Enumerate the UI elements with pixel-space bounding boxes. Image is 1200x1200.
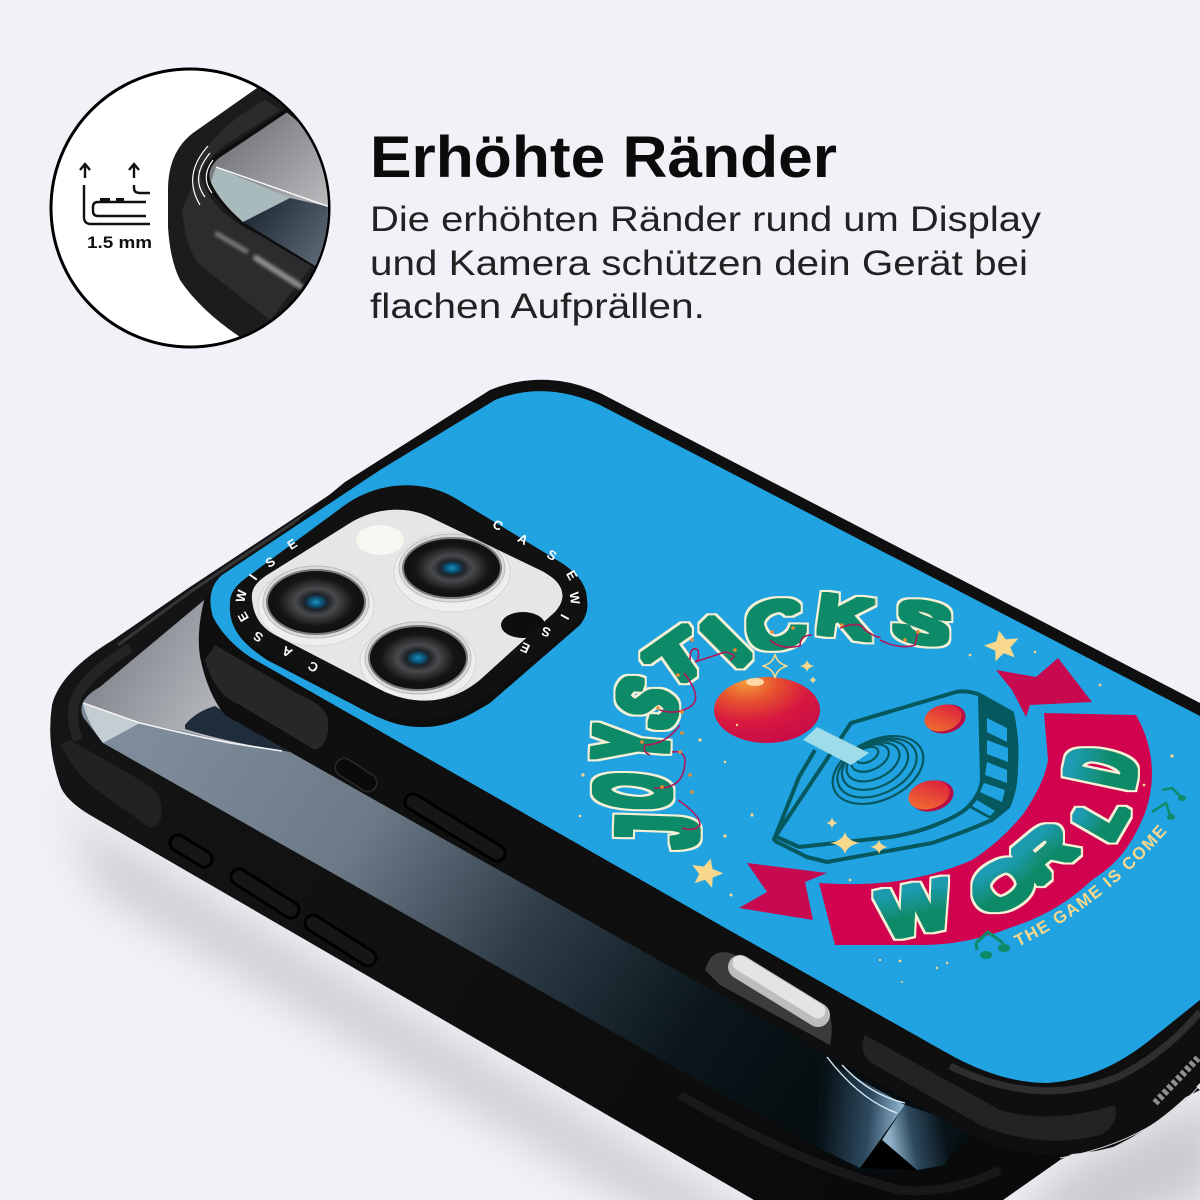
word: JOYSTICKS: S xyxy=(888,587,957,659)
rear frame top edge highlight xyxy=(118,478,360,645)
icon: music note left xyxy=(976,932,1010,959)
string lights xyxy=(644,624,918,829)
heading: Erhöhte Ränder xyxy=(370,125,837,190)
rear corner panel xyxy=(60,740,162,828)
front bottom corner panel xyxy=(862,1035,1116,1141)
lens: left xyxy=(263,566,369,638)
ring brand lettering xyxy=(233,516,583,676)
ring brand lettering: S xyxy=(262,553,278,571)
tagline: THE GAME IS COME xyxy=(1013,824,1167,946)
charging port xyxy=(705,952,832,1045)
button: volume up xyxy=(239,877,291,910)
console button top xyxy=(921,700,969,738)
lens: bottom xyxy=(365,622,471,694)
word: JOYSTICKS: C xyxy=(738,584,813,667)
ring brand lettering: S xyxy=(250,628,266,646)
text block: description: flachen Aufprällen. xyxy=(370,287,705,326)
panel: rear phone with screen protector xyxy=(50,470,1200,1200)
ring brand lettering: C xyxy=(490,516,506,534)
ring brand lettering: W xyxy=(233,588,250,604)
ring brand lettering: S xyxy=(539,623,553,640)
ring brand lettering: I xyxy=(246,571,260,583)
word: WORLD: D xyxy=(1045,740,1160,795)
word: TO: TO xyxy=(714,762,773,816)
screen reflection: pale triangle xyxy=(83,704,140,743)
word: WORLD: R xyxy=(1001,809,1088,897)
screen reflection: dark wedge xyxy=(185,706,290,752)
speaker holes xyxy=(1155,1058,1198,1103)
word: JOYSTICKS: I xyxy=(686,602,766,682)
word: JOYSTICKS: S xyxy=(597,662,699,744)
word: JOYSTICKS: K xyxy=(813,583,877,652)
word: THE: THE xyxy=(845,653,917,715)
panel: raised edge detail circle xyxy=(51,69,340,347)
confetti dots xyxy=(579,651,1174,983)
joystick stick xyxy=(803,727,869,765)
front corner panel xyxy=(205,645,328,750)
word: JOYSTICKS xyxy=(569,583,957,849)
word: WORLD xyxy=(873,740,1160,952)
rear frame corner band xyxy=(73,648,130,740)
blue case back xyxy=(210,391,1200,1083)
ring lower lip xyxy=(230,570,587,727)
word: WORLD: W xyxy=(873,865,958,952)
joystick base rings xyxy=(822,723,934,817)
icon: impact arcs xyxy=(193,146,213,205)
front lower frame highlight xyxy=(950,1012,1200,1091)
console side panel xyxy=(968,697,1016,820)
text block: description xyxy=(370,200,1042,326)
button: volume down xyxy=(313,923,368,958)
console button bottom xyxy=(905,776,957,816)
ring brand lettering: W xyxy=(567,591,583,606)
button: action xyxy=(178,843,204,859)
camera ring xyxy=(230,485,587,727)
front phone frame xyxy=(199,380,1200,1155)
ring brand lettering: C xyxy=(305,658,321,676)
rear screen xyxy=(81,570,1010,1174)
lidar sensor xyxy=(501,612,545,638)
text block: description: und Kamera schützen dein Gerät bei xyxy=(370,244,1028,283)
ring brand lettering: A xyxy=(279,643,295,661)
icon: stars xyxy=(688,627,1022,890)
screen reflection: grey xyxy=(84,575,300,751)
phone corner close-up xyxy=(168,88,328,336)
lens: top right xyxy=(399,534,505,602)
joystick console xyxy=(774,691,1016,862)
ring face xyxy=(230,485,587,719)
ring brand lettering: E xyxy=(518,639,532,656)
flash xyxy=(356,525,404,555)
icon: raised edge diagram xyxy=(80,164,150,224)
screen reflection: white curve xyxy=(83,703,282,751)
rear frame lower highlight xyxy=(680,1095,1000,1191)
text block: description: Die erhöhten Ränder rund um Display xyxy=(370,200,1042,239)
word: WORLD: O xyxy=(959,840,1049,930)
ribbon xyxy=(739,658,1152,945)
word: JOYSTICKS: J xyxy=(593,813,723,849)
icon: music note right xyxy=(1152,788,1186,820)
artwork: joysticks to the world xyxy=(569,583,1186,983)
ring brand lettering: E xyxy=(563,568,581,583)
lens bump tints xyxy=(258,532,510,702)
white edge line xyxy=(1060,1085,1200,1158)
phone shadows xyxy=(55,780,1200,1200)
word: JOYSTICKS: T xyxy=(635,615,719,704)
label: 1.5 mm: 1.5 mm xyxy=(87,233,152,252)
ring brand lettering: S xyxy=(544,546,560,564)
joystick ball xyxy=(714,677,820,743)
word: WORLD: L xyxy=(1062,783,1141,850)
ring brand lettering: E xyxy=(284,535,300,553)
word: JOYSTICKS: O xyxy=(572,770,695,813)
rear lower screen glare xyxy=(815,1057,965,1170)
ring brand lettering: I xyxy=(557,612,572,622)
word: JOYSTICKS: Y xyxy=(569,722,692,766)
side switch xyxy=(332,755,380,795)
rear phone body xyxy=(50,470,1200,1200)
camera plateau xyxy=(252,510,563,701)
side button xyxy=(413,802,497,853)
console side vents xyxy=(972,718,1008,816)
panel: front phone with blue case xyxy=(198,380,1200,1158)
ring brand lettering: E xyxy=(234,609,252,624)
string light bulbs xyxy=(640,623,920,794)
ring brand lettering: A xyxy=(515,530,531,548)
